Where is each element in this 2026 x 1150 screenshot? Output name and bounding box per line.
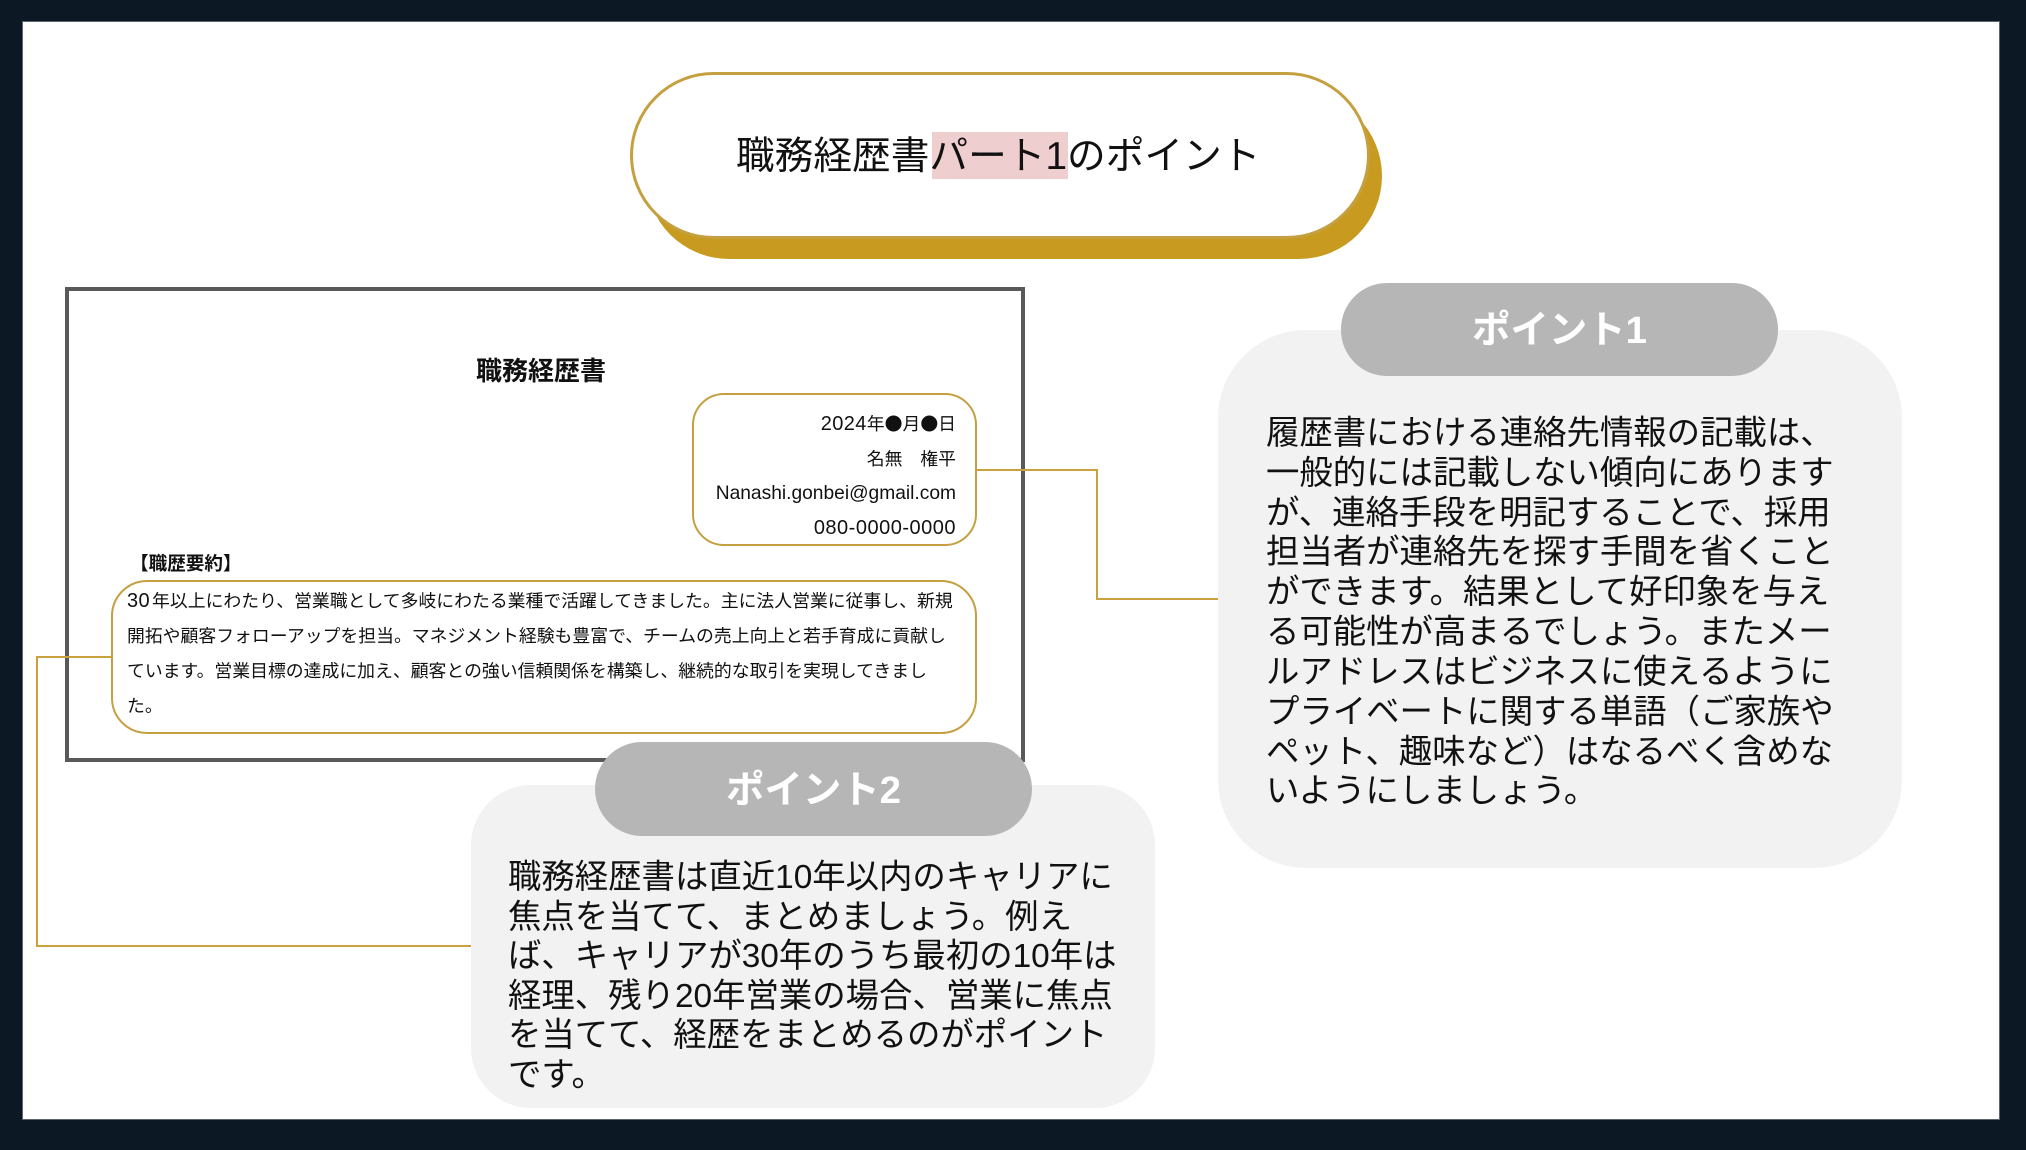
point 1 body text: る可能性が高まるでしょう。またメー <box>1266 614 1832 650</box>
point 1 body text <box>1266 414 1834 810</box>
point 2 body text <box>508 859 1117 1094</box>
point 2 badge <box>595 742 1032 836</box>
point 1 body text: が、連絡手段を明記することで、採用 <box>1266 494 1831 532</box>
point 1 body text: ルアドレスはビジネスに使えるように <box>1266 654 1833 690</box>
document content <box>111 356 977 734</box>
point 1 body text: ペット、趣味など）はなるべく含めな <box>1266 734 1833 770</box>
document heading: 職務経歴書 <box>476 356 606 386</box>
summary box <box>111 580 977 734</box>
point 1 body text: プライベートに関する単語（ご家族や <box>1266 694 1834 730</box>
point 1 body text: 履歴書における連絡先情報の記載は、 <box>1266 414 1834 452</box>
point 2 body text: ば、キャリアが30年のうち最初の10年は <box>508 938 1117 975</box>
point 1 body text: 担当者が連絡先を探す手間を省くこと <box>1266 534 1834 570</box>
point 2 body text: 職務経歴書は直近10年以内のキャリアに <box>508 859 1113 896</box>
point 1 body text: いようにしましょう。 <box>1266 772 1597 810</box>
point 1 body text: 一般的には記載しない傾向にあります <box>1266 454 1834 492</box>
point 2 body text: 経理、残り20年営業の場合、営業に焦点 <box>508 978 1113 1015</box>
title pill with gold shadow <box>630 72 1382 259</box>
email: Nanashi.gonbei@gmail.com <box>716 483 956 504</box>
summary line 2: 開拓や顧客フォローアップを担当。マネジメント経験も豊富で、チームの売上向上と若手育成に貢献し <box>127 626 946 646</box>
title highlight <box>932 132 1068 179</box>
point 2 body text: 焦点を当てて、まとめましょう。例え <box>508 899 1072 936</box>
phone: 080-0000-0000 <box>814 517 956 539</box>
point 2 label: ポイント2 <box>726 769 901 812</box>
summary line 4: た。 <box>127 696 163 716</box>
panel: point 2 <box>471 742 1155 1108</box>
summary heading: 【職歴要約】 <box>130 553 242 574</box>
name: 名無 権平 <box>867 448 956 468</box>
contact details box <box>692 393 977 546</box>
title pill shadow <box>646 93 1382 259</box>
document frame <box>65 287 1025 762</box>
point 1 badge <box>1341 283 1778 376</box>
summary line 1: 30年以上にわたり、営業職として多岐にわたる業種で活躍してきました。主に法人営業に従事し、新規 <box>127 590 953 612</box>
connector: contact box to point 1 <box>977 469 1218 600</box>
title pill outline <box>630 72 1370 239</box>
point 2 background <box>471 785 1155 1108</box>
point 2 body text: です。 <box>508 1057 605 1094</box>
point 1 body text: ができます。結果として好印象を与え <box>1266 574 1829 610</box>
point 1 background <box>1218 330 1902 868</box>
summary line 3: ています。営業目標の達成に加え、顧客との強い信頼関係を構築し、継続的な取引を実現してきまし <box>127 661 927 681</box>
connector: summary box to point 2 <box>36 656 471 947</box>
panel: point 1 <box>1218 283 1902 868</box>
point 2 body text: を当てて、経歴をまとめるのがポイント <box>508 1017 1107 1054</box>
point 1 label: ポイント1 <box>1472 309 1647 352</box>
title text: 職務経歴書パート1のポイント <box>736 135 1260 178</box>
date: 2024年●月●日 <box>821 410 956 436</box>
